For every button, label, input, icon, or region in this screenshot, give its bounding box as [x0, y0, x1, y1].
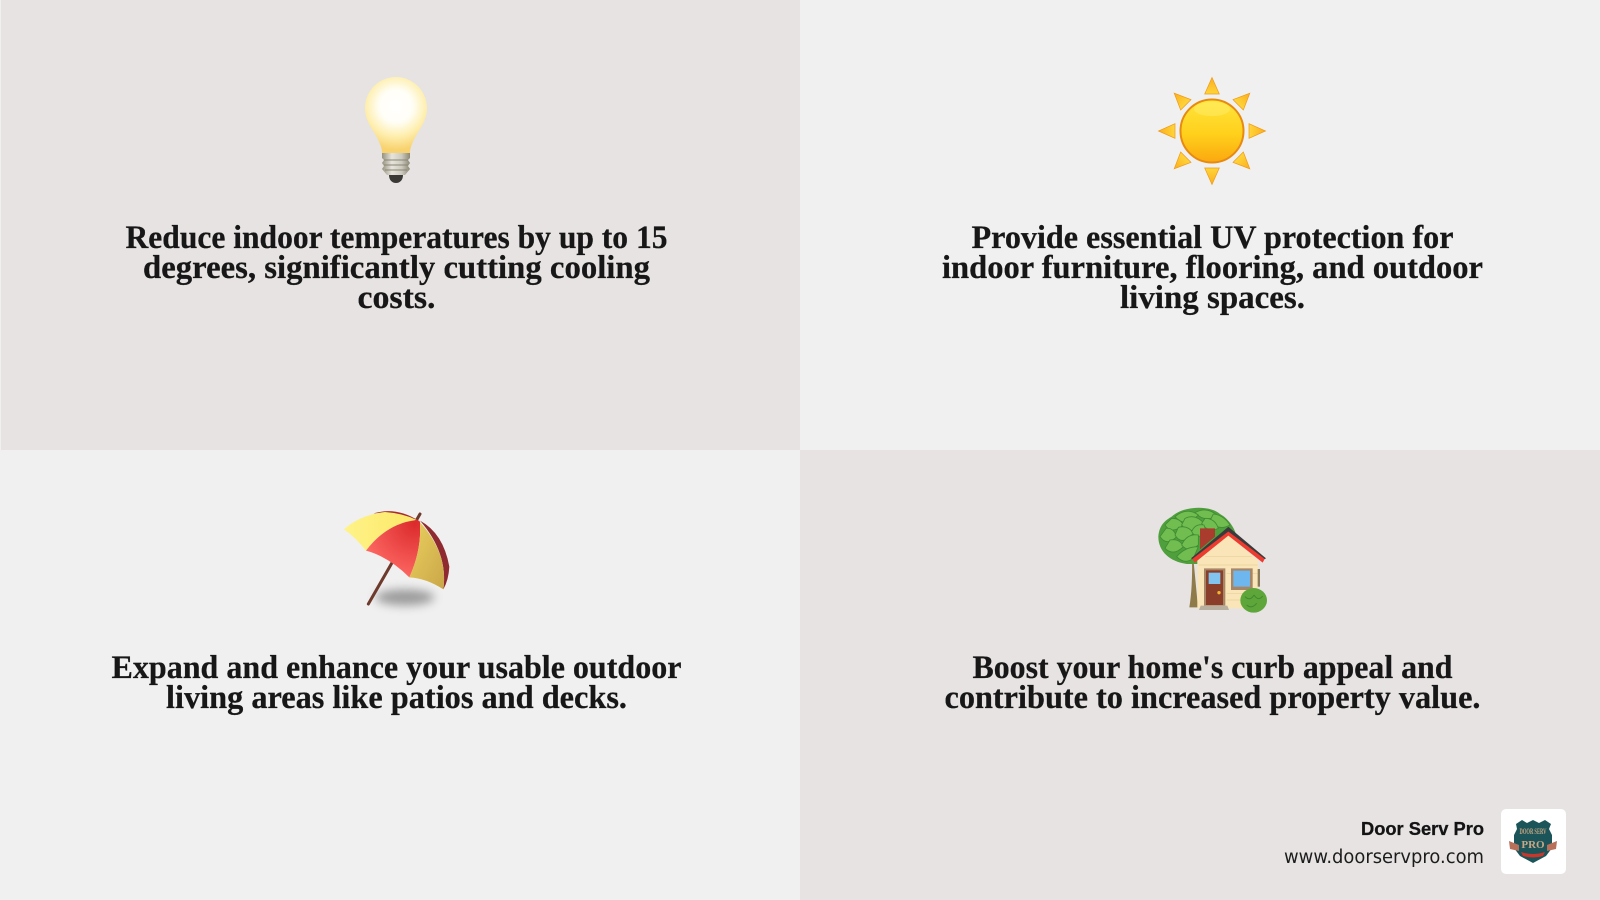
text: curb appeal: Boost your home's curb appeal and [972, 650, 1452, 686]
text: indoor temperatures: costs. [358, 280, 436, 316]
text: outdoor living: living areas like patios and decks. [166, 680, 627, 716]
text: curb appeal [944, 650, 1480, 716]
panel: UV protection [800, 0, 1600, 450]
icon: house with tree [1158, 508, 1267, 613]
logo badge [1501, 809, 1566, 874]
text: UV protection: living spaces. [1120, 280, 1305, 316]
logo badge: PRO [1521, 839, 1545, 851]
text: UV protection [942, 220, 1483, 316]
panel: outdoor living [1, 450, 800, 900]
text: UV protection: Provide essential UV protection for [972, 220, 1454, 256]
text: indoor temperatures: Reduce indoor temperatures by up to 15 [126, 220, 668, 256]
logo badge: DOOR SERV [1520, 827, 1547, 836]
icon: sun [1158, 78, 1266, 184]
brand url: www.doorservpro.com [1284, 847, 1484, 868]
text: indoor temperatures [126, 220, 668, 316]
text: UV protection: indoor furniture, flooring, and outdoor [942, 250, 1483, 286]
text: outdoor living [112, 650, 682, 716]
panel: indoor temperatures [1, 0, 800, 450]
text: outdoor living: Expand and enhance your usable outdoor [112, 650, 682, 686]
panel: curb appeal [800, 450, 1600, 900]
brand name: Door Serv Pro [1361, 818, 1484, 839]
icon: light bulb [365, 77, 427, 183]
text: indoor temperatures: degrees, significantly cutting cooling [143, 250, 650, 286]
icon: beach umbrella [344, 511, 449, 605]
text: curb appeal: contribute to increased property value. [944, 680, 1480, 716]
